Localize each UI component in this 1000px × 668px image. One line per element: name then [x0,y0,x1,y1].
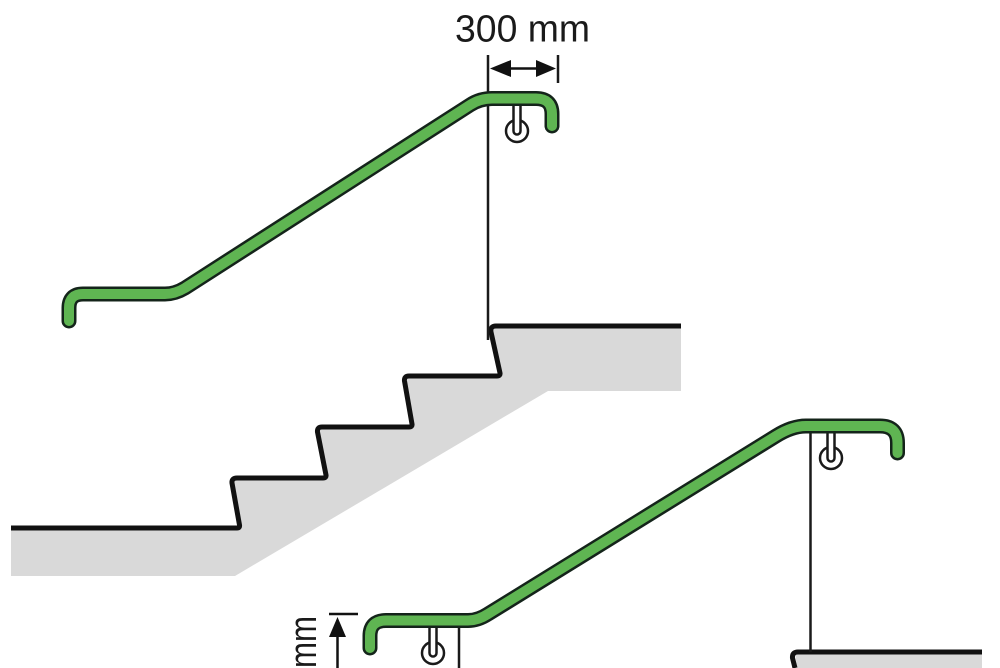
dimension label: 300 mm [455,8,590,50]
dimension: 300 mm [455,8,590,83]
lower vertical reference line left [458,626,460,668]
upper stair flight [11,326,681,576]
rotated height label: mm [283,616,325,668]
upper vertical reference line [487,55,489,340]
dimension arrow [490,55,558,83]
upper green handrail [69,98,552,321]
lower right wall bracket [820,432,842,469]
lower green handrail [370,426,898,648]
dimension: height arrow [329,614,358,668]
lower vertical reference line right [809,432,812,652]
lower left wall bracket [422,627,444,664]
upper wall bracket [506,104,528,142]
lower stair landing [792,652,982,668]
